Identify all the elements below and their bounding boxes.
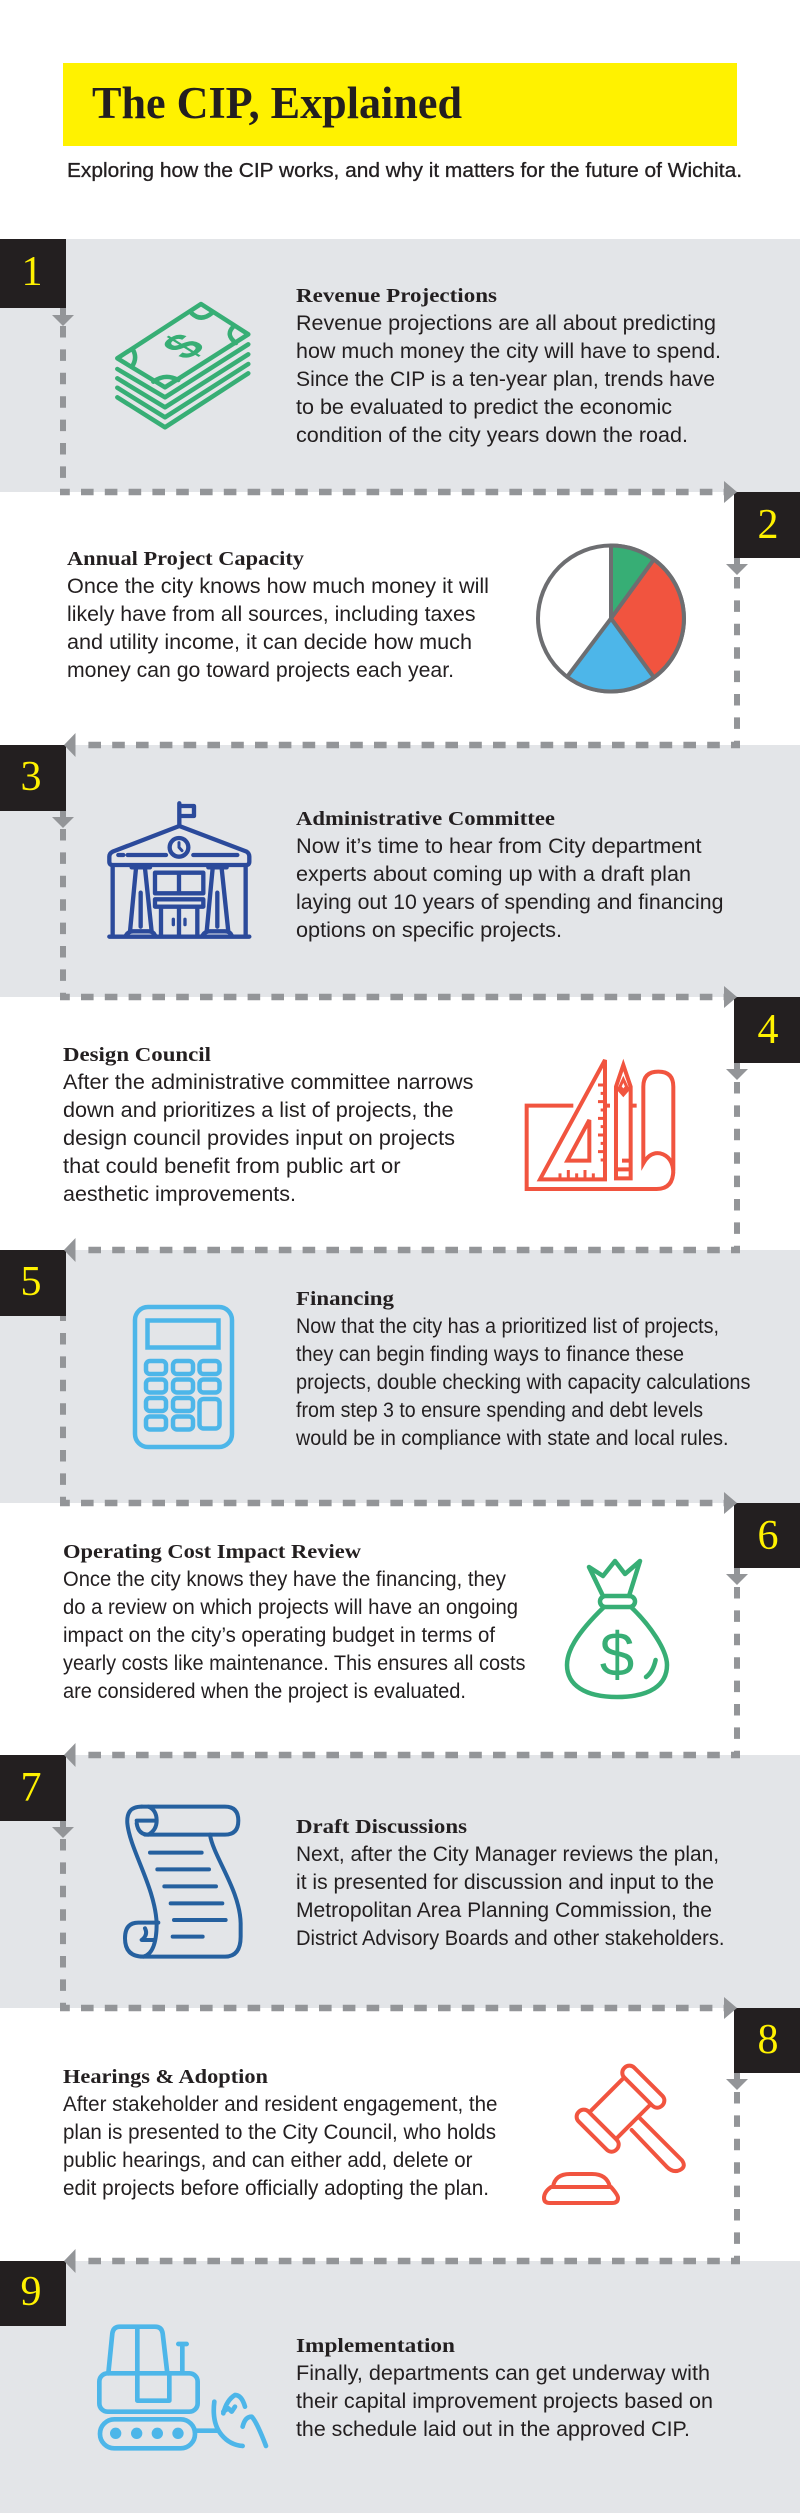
arrow: step 7 to step 8 — [52, 1821, 737, 2019]
body text: aesthetic improvements. — [63, 1182, 296, 1206]
body text: down and prioritizes a list of projects, the — [63, 1098, 454, 1122]
panel: step 7 draft discussions: 7 — [20, 1765, 42, 1811]
body text: their capital improvement projects based on — [296, 2389, 713, 2413]
body text: Now it’s time to hear from City department — [296, 834, 702, 858]
body text — [63, 1070, 474, 1206]
panel: step 3 administrative committee: 3 — [20, 754, 42, 800]
title banner: The CIP, Explained — [92, 78, 462, 128]
panel: step 5 financing — [0, 1250, 800, 1503]
body text — [296, 311, 721, 447]
panel: step 5 financing: 5 — [20, 1259, 42, 1305]
arrow: step 8 to step 9 — [64, 2073, 748, 2273]
icon: calculator — [135, 1307, 232, 1447]
panel: step 7 draft discussions — [0, 1755, 800, 2008]
heading: Administrative Committee — [296, 808, 555, 830]
panel: step 3 administrative committee — [0, 745, 800, 997]
heading: Operating Cost Impact Review — [63, 1541, 361, 1563]
body text: Once the city knows how much money it will — [67, 574, 489, 598]
heading: Financing — [296, 1288, 395, 1310]
body text: and utility income, it can decide how much — [67, 630, 472, 654]
body text: the schedule laid out in the approved CIP. — [296, 2417, 690, 2441]
arrow: step 2 to step 3 — [64, 558, 748, 757]
body text: plan is presented to the City Council, who holds — [63, 2120, 496, 2144]
icon: stack of money: $ — [150, 325, 216, 367]
body text: impact on the city’s operating budget in terms of — [63, 1623, 495, 1647]
body text: do a review on which projects will have an ongoing — [63, 1595, 518, 1619]
heading: Hearings & Adoption — [63, 2066, 269, 2088]
panel: step 4 design council: 4 — [758, 1007, 778, 1053]
body text: public hearings, and can either add, delete or — [63, 2148, 472, 2172]
title banner — [63, 63, 737, 146]
body text: condition of the city years down the road. — [296, 423, 688, 447]
body text: design council provides input on projects — [63, 1126, 455, 1150]
pie chart — [538, 546, 684, 692]
body text: Finally, departments can get underway with — [296, 2361, 710, 2385]
body text: District Advisory Boards and other stakeholders. — [296, 1926, 724, 1950]
arrow: step 3 to step 4 — [52, 811, 737, 1008]
icon: stack of money — [117, 304, 248, 427]
panel: step 6 operating cost impact review — [63, 1503, 800, 1703]
body text: it is presented for discussion and input to the — [296, 1870, 714, 1894]
panel: step 4 design council — [63, 997, 800, 1206]
panel: step 9 implementation — [0, 2261, 800, 2513]
body text: edit projects before officially adopting the plan. — [63, 2176, 489, 2200]
icon: money bag: $ — [600, 1621, 634, 1690]
subtitle: Exploring how the CIP works, and why it matters for the future of Wichita. — [67, 160, 742, 182]
arrow: step 1 to step 2 — [52, 308, 737, 503]
body text: yearly costs like maintenance. This ensures all costs — [63, 1651, 526, 1675]
body text — [296, 2361, 713, 2441]
heading: Annual Project Capacity — [67, 548, 305, 570]
body text: are considered when the project is evaluated. — [63, 1679, 466, 1703]
body text: Since the CIP is a ten-year plan, trends have — [296, 367, 715, 391]
icon: paper scroll — [125, 1807, 241, 1957]
body text — [295, 1314, 750, 1450]
body text: laying out 10 years of spending and financing — [296, 890, 724, 914]
body text: would be in compliance with state and local rules. — [295, 1426, 728, 1450]
body text: to be evaluated to predict the economic — [296, 395, 672, 419]
body text: After stakeholder and resident engagement, the — [63, 2092, 498, 2116]
panel: step 2 annual project capacity — [67, 492, 800, 692]
panel: step 1 revenue projections — [0, 239, 800, 492]
panel: step 8 hearings and adoption: 8 — [758, 2017, 778, 2063]
body text: Once the city knows they have the financing, they — [63, 1567, 506, 1591]
body text — [67, 574, 489, 682]
body text: projects, double checking with capacity calculations — [296, 1370, 750, 1394]
body text: they can begin finding ways to finance these — [296, 1342, 684, 1366]
body text — [296, 834, 724, 942]
icon: city hall building — [109, 803, 249, 937]
body text: how much money the city will have to spend. — [296, 339, 721, 363]
body text: options on specific projects. — [296, 918, 562, 942]
icon: money bag — [567, 1561, 667, 1697]
body text: likely have from all sources, including taxes — [67, 602, 476, 626]
panel: step 6 operating cost impact review: 6 — [758, 1513, 778, 1559]
body text: Revenue projections are all about predicting — [296, 311, 716, 335]
icon: ruler, pencil and blueprint — [527, 1060, 673, 1189]
heading: Design Council — [63, 1044, 211, 1066]
panel: step 1 revenue projections: 1 — [22, 249, 42, 295]
body text: money can go toward projects each year. — [67, 658, 454, 682]
panel: step 8 hearings and adoption — [63, 2008, 800, 2203]
heading: Draft Discussions — [296, 1816, 467, 1838]
arrow: step 5 to step 6 — [60, 1316, 737, 1514]
body text: Next, after the City Manager reviews the plan, — [296, 1842, 719, 1866]
arrow: step 4 to step 5 — [64, 1063, 748, 1262]
panel: step 9 implementation: 9 — [20, 2269, 42, 2315]
heading: Revenue Projections — [296, 285, 497, 307]
body text: from step 3 to ensure spending and debt levels — [296, 1398, 703, 1422]
arrow: step 6 to step 7 — [64, 1568, 748, 1767]
heading: Implementation — [296, 2335, 456, 2357]
body text: After the administrative committee narrows — [63, 1070, 474, 1094]
icon: bulldozer — [99, 2327, 266, 2448]
body text — [63, 2092, 498, 2200]
body text — [296, 1842, 724, 1950]
body text: Now that the city has a prioritized list of projects, — [296, 1314, 719, 1338]
body text: Metropolitan Area Planning Commission, the — [296, 1898, 712, 1922]
icon: gavel — [544, 2063, 684, 2203]
body text: experts about coming up with a draft plan — [296, 862, 691, 886]
body text — [63, 1567, 526, 1703]
body text: that could benefit from public art or — [63, 1154, 400, 1178]
panel: step 2 annual project capacity: 2 — [758, 502, 778, 548]
